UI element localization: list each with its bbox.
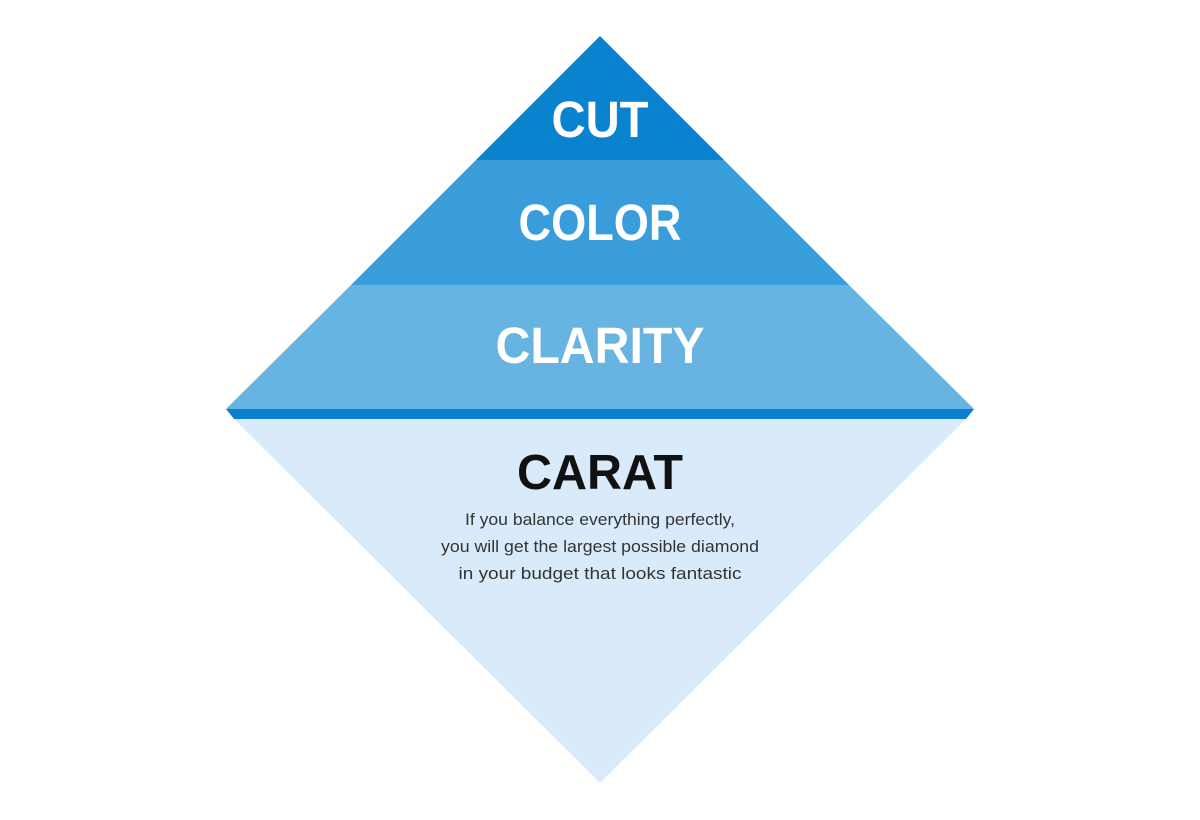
band: cut	[476, 36, 724, 160]
heading: carat: CARAT	[517, 446, 683, 500]
text block: carat description: in your budget that looks fantastic	[458, 564, 742, 583]
band: clarity	[226, 285, 974, 409]
label: cut: CUT	[552, 91, 648, 148]
text block: carat description: you will get the largest possible diamond	[441, 537, 759, 556]
band: color	[351, 160, 849, 285]
divider stripe	[226, 409, 974, 419]
label: color: COLOR	[518, 194, 682, 251]
label: clarity: CLARITY	[496, 317, 704, 374]
band: carat	[234, 419, 966, 783]
text block: carat description: If you balance everything perfectly,	[465, 510, 735, 529]
text block: carat description	[441, 510, 759, 583]
